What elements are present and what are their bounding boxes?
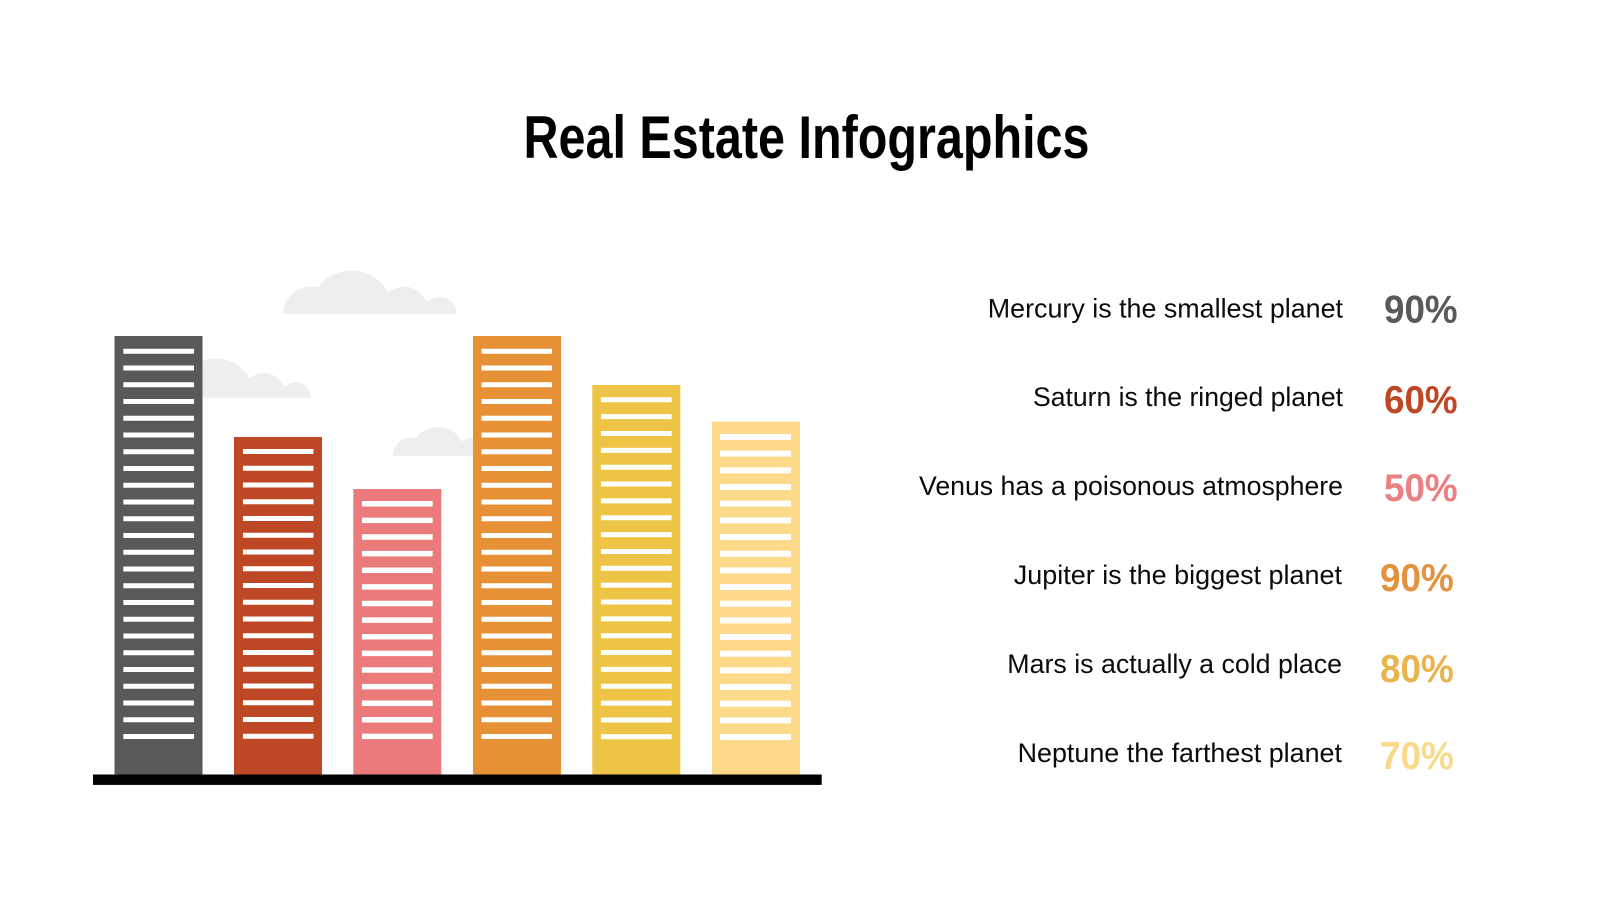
row: Mars: Mars is actually a cold place: [1007, 649, 1342, 679]
row: Jupiter: 90%: [1380, 557, 1454, 600]
title: Real Estate Infographics: [524, 104, 1090, 171]
icon: cloud lower: [393, 427, 507, 456]
building: yellow 80%: [592, 385, 680, 774]
building: red 60%: [234, 437, 322, 774]
building: light yellow 70%: [712, 422, 800, 774]
row: Jupiter: Jupiter is the biggest planet: [1014, 560, 1342, 590]
building: pink 50%: [353, 489, 441, 774]
icon: cloud top: [283, 271, 457, 314]
building: orange 90%: [473, 336, 561, 774]
row: Saturn: [1033, 379, 1458, 422]
row: Mars: [1007, 648, 1454, 691]
legend list: [919, 288, 1458, 778]
row: Mars: 80%: [1380, 648, 1454, 691]
row: Venus: 50%: [1384, 467, 1458, 510]
row: Saturn: 60%: [1384, 379, 1458, 422]
row: Mercury: [988, 288, 1458, 332]
row: Mercury: 90%: [1384, 288, 1458, 332]
row: Venus: Venus has a poisonous atmosphere: [919, 471, 1343, 501]
row: Jupiter: [1014, 557, 1454, 600]
row: Neptune: 70%: [1380, 735, 1454, 778]
chart: buildings skyline: [93, 271, 822, 785]
icon: cloud middle: [155, 359, 311, 398]
row: Neptune: [1018, 735, 1454, 778]
row: Neptune: Neptune the farthest planet: [1018, 738, 1342, 768]
row: Venus: [919, 467, 1458, 510]
row: Mercury: Mercury is the smallest planet: [988, 293, 1343, 323]
row: Saturn: Saturn is the ringed planet: [1033, 382, 1343, 412]
ground line: [93, 774, 822, 785]
building: dark grey 90%: [114, 336, 202, 774]
